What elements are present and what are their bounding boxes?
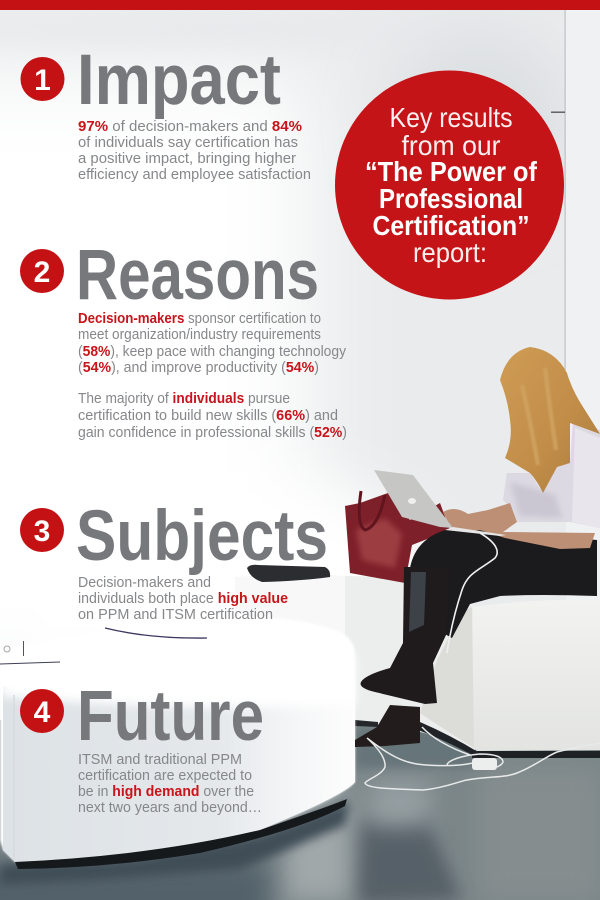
text: Future body: be in high demand over the xyxy=(78,783,254,800)
text: Reasons decision-makers: (58%), keep pace with changing technology xyxy=(78,343,346,360)
text: Impact body: of individuals say certification has xyxy=(78,134,298,151)
number badge 4: 4 xyxy=(34,696,51,729)
text: Reasons decision-makers: meet organization/industry requirements xyxy=(78,326,321,343)
callout circle: report: “The Power of xyxy=(365,156,538,187)
text: Reasons decision-makers: Decision-makers sponsor certification to xyxy=(78,310,321,327)
number badge 2: 2 xyxy=(34,256,50,289)
text: Impact body: efficiency and employee satisfaction xyxy=(78,166,311,183)
number badge 1 xyxy=(20,57,64,101)
number badge 2 xyxy=(20,249,64,293)
woman with laptop and bag xyxy=(345,347,600,790)
section 3: Subjects xyxy=(20,497,328,623)
upper boot xyxy=(361,567,450,704)
text: Impact body: a positive impact, bringing higher xyxy=(78,150,296,167)
text: Future body: next two years and beyond… xyxy=(78,799,262,816)
laptop xyxy=(374,470,453,528)
callout circle: report: report: xyxy=(413,237,487,268)
callout circle: report: Professional xyxy=(379,183,523,214)
callout circle: report: from our xyxy=(402,130,500,161)
text: Subjects body: on PPM and ITSM certification xyxy=(78,606,273,623)
lower boot xyxy=(355,705,420,747)
callout circle: report: Certification” xyxy=(372,210,530,241)
text: Reasons individuals xyxy=(78,390,347,441)
number badge 4 xyxy=(20,689,64,733)
clutch purse xyxy=(247,565,330,582)
charging cables xyxy=(447,533,497,653)
text: Subjects body: individuals both place high value xyxy=(78,590,288,607)
text: Subjects body: Decision-makers and xyxy=(78,574,211,591)
heading: Reasons: Reasons xyxy=(76,236,319,315)
text: Future body xyxy=(78,751,262,816)
shirt xyxy=(503,420,600,528)
section 2: Reasons xyxy=(20,236,347,441)
round white ottoman xyxy=(0,617,355,869)
section 1: Impact xyxy=(20,41,311,183)
text: Impact body xyxy=(78,118,311,183)
text: Impact body: 97% of decision-makers and 84% xyxy=(78,118,302,135)
number badge 1: 1 xyxy=(34,64,51,97)
text: Subjects body xyxy=(78,574,288,623)
heading: Impact: Impact xyxy=(77,41,281,120)
text: Reasons decision-makers: (54%), and improve productivity (54%) xyxy=(78,359,319,376)
text: Reasons individuals: gain confidence in professional skills (52%) xyxy=(78,424,347,441)
arm and hands xyxy=(443,503,595,549)
text: Reasons decision-makers xyxy=(78,310,346,376)
top red bar xyxy=(0,0,600,10)
text: Reasons individuals: The majority of individuals pursue xyxy=(78,390,290,407)
floor xyxy=(0,720,600,900)
text: Future body: certification are expected to xyxy=(78,767,252,784)
back seat xyxy=(235,574,478,758)
red handbag xyxy=(345,493,450,583)
heading: Subjects: Subjects xyxy=(76,497,328,576)
heading: Future: Future xyxy=(77,677,264,756)
text: Reasons individuals: certification to build new skills (66%) and xyxy=(78,407,338,424)
callout circle: report xyxy=(335,70,564,300)
section 4: Future xyxy=(20,677,264,816)
hair xyxy=(500,347,600,493)
text: Future body: ITSM and traditional PPM xyxy=(78,751,242,768)
right white cube seat xyxy=(420,600,600,758)
number badge 3 xyxy=(20,508,64,552)
number badge 3: 3 xyxy=(34,515,50,548)
skirt and tights xyxy=(410,528,597,638)
callout circle: report: Key results xyxy=(390,102,512,133)
